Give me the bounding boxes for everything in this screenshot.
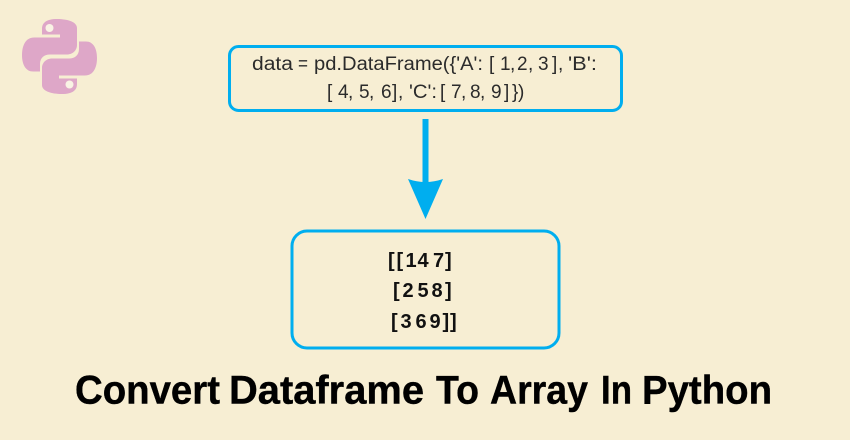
title: Convert [75, 368, 220, 412]
array output text: [369]] [391, 311, 457, 333]
code text: [1,2,3], [489, 54, 563, 75]
title [75, 368, 772, 412]
code text: pd.DataFrame({'A': [314, 54, 483, 75]
code text: 'B': [568, 54, 597, 75]
code text: = [298, 54, 308, 75]
code text [252, 54, 597, 103]
title: Array [490, 368, 589, 412]
array output text: [258] [393, 280, 452, 302]
array output text [388, 250, 457, 333]
title: In [601, 368, 632, 412]
title: Python [642, 368, 772, 412]
title: To [436, 368, 479, 412]
code text: [7,8,9]}) [440, 82, 524, 103]
panel: dataframe code box [230, 46, 622, 110]
code text: 'C': [409, 82, 437, 103]
code text: [4,5,6], [327, 82, 403, 103]
code text: data [252, 54, 293, 75]
panel: array result box [292, 231, 559, 348]
title: Dataframe [229, 368, 424, 412]
arrow: down [408, 119, 443, 219]
array output text: [[147] [388, 250, 452, 272]
icon: python logo [22, 19, 97, 94]
